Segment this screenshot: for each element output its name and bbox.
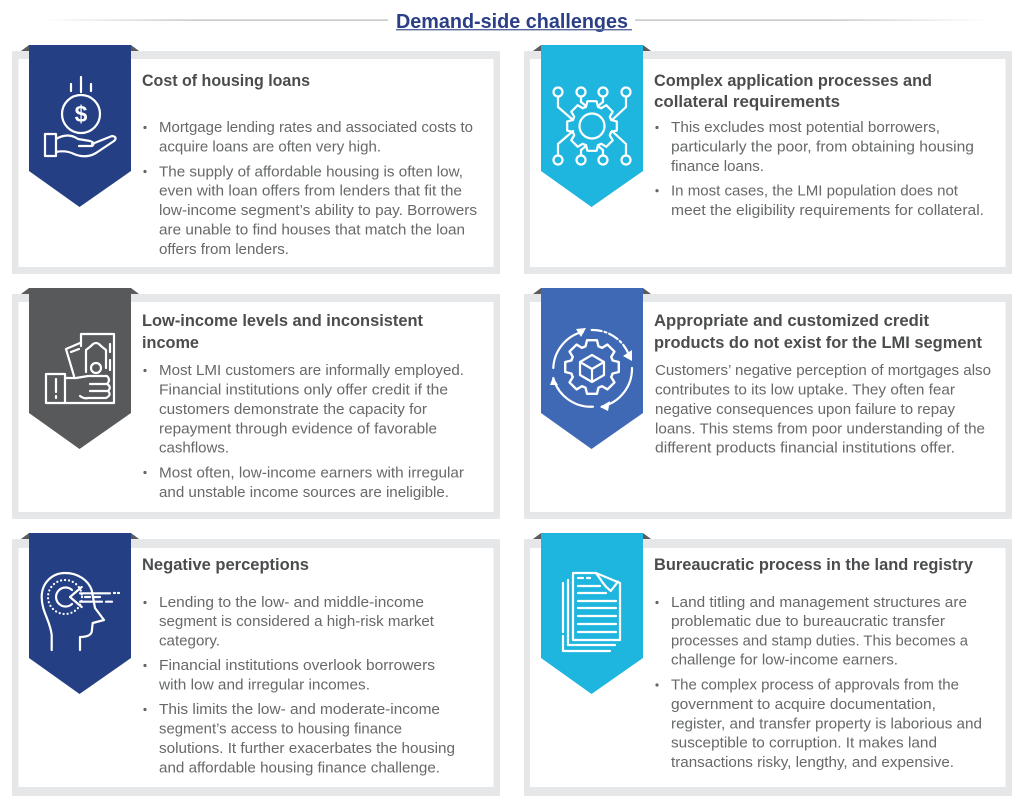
bullet list: Most LMI customers are informally employed. [159, 363, 464, 379]
bullet list: repayment through evidence of favorable [159, 421, 437, 437]
bullet list [655, 595, 982, 771]
paragraph: contributes to its low uptake. They often fear [655, 382, 955, 398]
ribbon [541, 45, 643, 207]
bullet list: and affordable housing finance challenge. [159, 761, 440, 777]
panel: cost of housing loans [12, 45, 500, 274]
heading: Bureaucratic process in the land registry [654, 556, 974, 574]
bullet list: particularly the poor, from obtaining housing [671, 140, 974, 156]
panel: low-income levels [12, 288, 500, 519]
heading: collateral requirements [654, 93, 840, 111]
heading: Complex application processes and [654, 72, 932, 90]
bullet list: Mortgage lending rates and associated costs to [159, 120, 473, 136]
panel: complex application processes [524, 45, 1012, 274]
bullet list: solutions. It further exacerbates the housing [159, 741, 455, 757]
bullet list: offers from lenders. [159, 242, 289, 258]
bullet list: problematic due to bureaucratic transfer [671, 614, 945, 630]
icon: coin in hand: $ [75, 101, 88, 127]
bullet list: low-income segment’s ability to pay. Borrowers [159, 203, 477, 219]
bullet list: finance loans. [671, 159, 764, 175]
bullet list: are unable to find houses that match the loan [159, 222, 465, 238]
icon: gear with cube and cycle arrows [550, 328, 632, 411]
heading: Appropriate and customized credit [654, 312, 930, 330]
bullet list: cashflows. [159, 441, 229, 457]
paragraph: loans. This stems from poor understanding of the [655, 421, 985, 437]
bullet list: Lending to the low- and middle-income [159, 595, 424, 611]
bullet list: Financial institutions overlook borrowers [159, 658, 435, 674]
heading: products do not exist for the LMI segment [654, 334, 982, 352]
bullet list [655, 120, 984, 219]
bullet list: even with loan offers from lenders that fit the [159, 184, 462, 200]
ribbon [29, 45, 131, 207]
paragraph: Customers’ negative perception of mortgages also [655, 363, 991, 379]
ribbon [541, 533, 643, 694]
icon: stacked documents [563, 573, 620, 651]
ribbon [29, 533, 131, 694]
heading [142, 312, 423, 352]
icon: cash in hand [46, 334, 114, 403]
paragraph: different products financial institutions offer. [655, 441, 955, 457]
bullet list: segment’s access to housing finance [159, 722, 402, 738]
bullet list: with low and irregular incomes. [158, 678, 370, 694]
heading: income [142, 334, 199, 352]
bullet list: meet the eligibility requirements for collateral. [671, 203, 984, 219]
bullet list [143, 120, 477, 258]
bullet list: segment is considered a high-risk market [159, 614, 434, 630]
panel: bureaucratic process [524, 533, 1012, 796]
bullet list: Land titling and management structures are [671, 595, 967, 611]
heading [654, 312, 982, 352]
paragraph [655, 363, 991, 457]
bullet list: challenge for low-income earners. [671, 653, 898, 669]
title: Demand-side challenges [396, 10, 628, 33]
bullet list [143, 363, 464, 501]
heading [654, 72, 932, 111]
bullet list: register, and transfer property is laborious and [671, 716, 982, 732]
ribbon [29, 288, 131, 449]
paragraph: negative consequences upon failure to repay [655, 402, 956, 418]
panel: appropriate credit products [524, 288, 1012, 519]
bullet list: government to acquire documentation, [671, 697, 936, 713]
bullet list [143, 595, 455, 777]
bullet list: susceptible to corruption. It makes land [671, 736, 937, 752]
bullet list: transactions risky, lengthy, and expensive. [671, 755, 954, 771]
bullet list: processes and stamp duties. This becomes a [671, 634, 968, 650]
heading: Negative perceptions [142, 556, 309, 574]
icon: coin in hand [45, 77, 116, 156]
panel: negative perceptions [12, 533, 500, 796]
bullet list: Most often, low-income earners with irregular [159, 465, 464, 481]
heading: Cost of housing loans [142, 72, 310, 90]
heading: Low-income levels and inconsistent [142, 312, 423, 330]
bullet list: In most cases, the LMI population does not [671, 184, 958, 200]
bullet list: The complex process of approvals from the [671, 678, 959, 694]
bullet list: customers demonstrate the capacity for [159, 402, 427, 418]
ribbon [541, 288, 643, 449]
bullet list: The supply of affordable housing is often low, [159, 164, 463, 180]
bullet list: This limits the low- and moderate-income [159, 702, 440, 718]
bullet list: This excludes most potential borrowers, [671, 120, 940, 136]
bullet list: category. [159, 634, 220, 650]
icon: head with target arrow [42, 573, 119, 650]
bullet list: Financial institutions only offer credit if the [159, 382, 448, 398]
bullet list: acquire loans are often very high. [159, 140, 381, 156]
bullet list: and unstable income sources are ineligible. [159, 485, 449, 501]
icon: gear network [554, 88, 630, 164]
